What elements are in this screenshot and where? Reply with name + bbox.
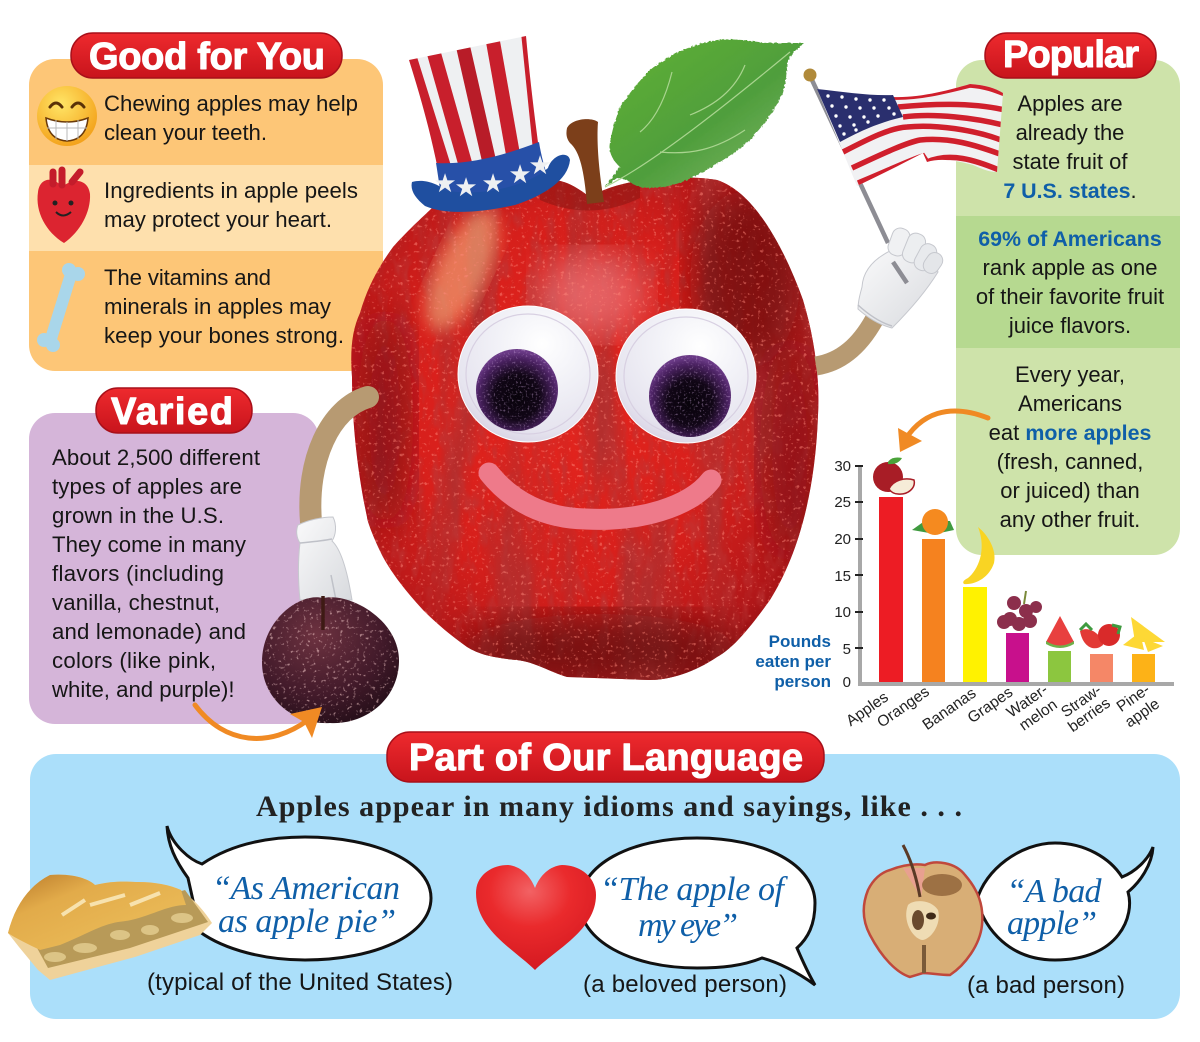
subheading: Apples appear in many idioms and sayings, like . . . (256, 790, 962, 823)
arm: left (310, 397, 368, 522)
text: more apples (989, 362, 1151, 532)
heading: good for you: Good for You (89, 36, 325, 78)
uncle sam hat: ★ (433, 168, 457, 198)
panel: varied: colors (like pink, (52, 648, 216, 673)
y axis label: person (774, 672, 831, 691)
heading: varied: Varied (111, 391, 233, 433)
bubble: the apple of my eye: “The apple of (600, 871, 789, 908)
text: more apples: any other fruit. (1000, 507, 1140, 532)
panel: part of our language (30, 754, 1180, 1019)
bubble: as american as apple pie: as apple pie” (218, 903, 396, 940)
stem (566, 119, 604, 204)
purple apple (260, 590, 402, 726)
icon: grapes (997, 591, 1042, 631)
category labels: apple (1122, 695, 1163, 731)
uncle sam hat: ★ (508, 159, 532, 189)
axis numbers: 20 (834, 531, 851, 548)
arrow: to apples bar (898, 411, 988, 452)
bar chart: pounds eaten per person (755, 411, 1174, 736)
text: teeth: Chewing apples may help (104, 91, 358, 116)
bubble: a bad apple (977, 843, 1153, 960)
panel: popular (956, 60, 1180, 555)
panel: varied: white, and purple)! (51, 677, 235, 702)
category labels: Straw- (1058, 682, 1105, 721)
caption: typical of the united states: (typical of the United States) (147, 969, 453, 996)
text: bones: The vitamins and (104, 265, 271, 290)
icon: bone (37, 263, 85, 352)
text: more apples: Americans (1018, 391, 1122, 416)
bars (879, 497, 1155, 682)
text: juice: 69% of Americans (978, 227, 1162, 251)
text: juice: of their favorite fruit (976, 284, 1164, 309)
panel: good for you (29, 59, 383, 371)
category labels: melon (1016, 696, 1061, 734)
y axis label: Pounds (769, 632, 831, 651)
bubble: a bad apple: apple” (1007, 905, 1097, 942)
icon: smiling emoji (37, 86, 97, 146)
uncle sam hat: ★ (528, 150, 552, 180)
left glove (297, 517, 352, 600)
text: teeth (104, 91, 358, 145)
text: teeth: clean your teeth. (104, 120, 267, 145)
text: more apples: or juiced) than (1000, 478, 1140, 503)
right glove (858, 226, 946, 328)
right googly eye (616, 309, 756, 443)
text: bones: minerals in apples may (104, 294, 332, 319)
text: more apples: eat more apples (989, 420, 1151, 445)
text: more apples: (fresh, canned, (997, 449, 1143, 474)
y axis label (755, 632, 831, 691)
panel: varied: grown in the U.S. (52, 503, 224, 528)
axis numbers: 30 (834, 458, 851, 475)
text: state fruit: state fruit of (1013, 149, 1128, 174)
panel: varied: types of apples are (52, 474, 242, 499)
icon: watermelon (1046, 616, 1074, 648)
uncle sam hat (409, 32, 570, 212)
bubble: the apple of my eye (580, 838, 815, 985)
axis numbers: 0 (843, 674, 851, 691)
y axis label: eaten per (755, 652, 831, 671)
axis numbers: 10 (834, 604, 851, 621)
category labels: berries (1065, 695, 1114, 736)
text: state fruit: already the (1016, 120, 1124, 145)
arrow: to purple apple (195, 705, 322, 738)
category labels: Bananas (919, 685, 980, 734)
category labels: Water- (1004, 681, 1051, 721)
text: more apples: Every year, (1015, 362, 1125, 387)
category labels: Oranges (874, 683, 933, 731)
smile (489, 473, 711, 519)
category labels: Pine- (1114, 681, 1153, 716)
panel: varied: flavors (including (52, 561, 224, 586)
bubble: as american as apple pie: “As American (212, 870, 400, 907)
icon: strawberries (1080, 624, 1120, 648)
icon: orange (912, 509, 954, 535)
bubble: a bad apple: “A bad (1006, 873, 1102, 910)
bubble: as american as apple pie (167, 826, 431, 960)
icon: heart organ (38, 170, 90, 243)
text: heart: Ingredients in apple peels (104, 178, 358, 203)
leaf (605, 39, 804, 188)
text: bones: keep your bones strong. (104, 323, 344, 348)
text: state fruit (1003, 91, 1137, 203)
icon: apple (873, 458, 914, 494)
axis numbers (834, 458, 851, 691)
icon: bad apple (864, 845, 982, 977)
caption: a beloved person: (a beloved person) (583, 971, 787, 998)
panel: varied: About 2,500 different (52, 445, 260, 470)
axis numbers: 5 (843, 641, 851, 658)
text: juice (976, 227, 1164, 338)
text: heart: may protect your heart. (104, 207, 332, 232)
text: juice: juice flavors. (1008, 313, 1131, 338)
icon: apple pie (8, 875, 212, 980)
icon: banana (963, 527, 995, 584)
panel: varied: and lemonade) and (52, 619, 246, 644)
bubble: the apple of my eye: my eye” (638, 907, 738, 944)
category labels: Grapes (965, 684, 1016, 727)
uncle sam hat: ★ (481, 168, 505, 198)
left googly eye (458, 306, 598, 442)
heading: popular: Popular (1003, 34, 1139, 76)
axis numbers: 25 (834, 494, 851, 511)
apple character (345, 39, 825, 686)
text: heart (104, 178, 358, 232)
uncle sam hat: ★ (454, 172, 478, 202)
panel: varied: They come in many (52, 532, 247, 557)
panel: varied: vanilla, chestnut, (52, 590, 220, 615)
heading: part of our language: Part of Our Language (409, 737, 803, 779)
text: juice: rank apple as one (983, 255, 1157, 280)
text: state fruit: 7 U.S. states. (1003, 178, 1137, 203)
apple body (345, 170, 825, 686)
icon: pineapple (1123, 617, 1165, 652)
flag (804, 68, 1005, 243)
category labels (843, 681, 1163, 736)
text: bones (104, 265, 344, 348)
caption: a bad person: (a bad person) (967, 972, 1125, 999)
axis numbers: 15 (834, 568, 851, 585)
panel: varied (29, 413, 319, 724)
icon: red heart (476, 865, 596, 970)
category labels: Apples (843, 689, 892, 730)
text: state fruit: Apples are (1017, 91, 1123, 116)
arm: right (816, 320, 874, 366)
